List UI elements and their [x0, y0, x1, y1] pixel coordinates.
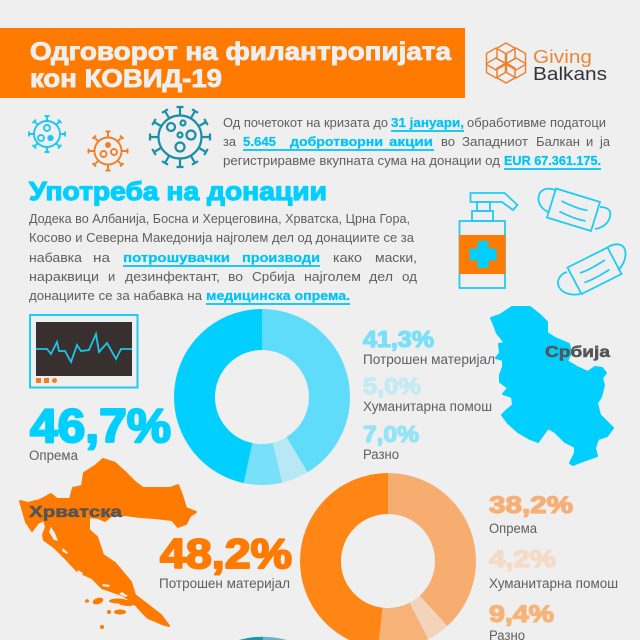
body text block: и — [108, 269, 115, 284]
body text block — [29, 211, 417, 305]
body text block: донациите се за набавка на — [29, 288, 203, 303]
body text block: маски, — [375, 250, 417, 265]
intro text block: обработивме податоци — [467, 115, 606, 130]
body text block: дел — [369, 269, 393, 284]
body text block: на — [93, 250, 111, 265]
legend: Croatia — [489, 492, 618, 640]
legend: Croatia: Опрема — [489, 521, 538, 536]
body text block: Србија — [252, 269, 296, 284]
body text block: потрошувачки — [123, 250, 230, 265]
icon: large teal virus — [150, 107, 210, 167]
body text block: како — [333, 250, 362, 265]
intro text block: Балкан — [536, 134, 580, 149]
donut chart: Serbia — [194, 330, 330, 464]
title banner: Одговорот на филантропијата — [30, 38, 452, 66]
logo: Giving Balkans: Balkans — [533, 64, 607, 84]
icon: mask upper — [538, 188, 610, 231]
stat: Serbia equipment: Опрема — [29, 448, 79, 463]
donut chart: Croatia — [320, 494, 456, 628]
legend: Serbia: Потрошен материјал — [363, 352, 495, 367]
body text block: медицинска опрема. — [206, 288, 350, 303]
donut chart: next country, cropped at page bottom — [239, 637, 287, 640]
intro text block: акции — [389, 134, 433, 149]
title banner: кон КОВИД-19 — [30, 65, 222, 93]
body text block: набавка — [29, 250, 83, 265]
heading: use of donations: Употреба на донации — [29, 176, 327, 206]
intro text block: во — [441, 134, 455, 149]
intro text block: Западниот — [462, 134, 528, 149]
icon: small orange virus — [88, 132, 128, 170]
icon: mask lower — [558, 244, 626, 295]
stat: Croatia consumables: 48,2% — [160, 530, 292, 577]
body text block: во — [228, 269, 243, 284]
intro text block: EUR 67.361.175. — [504, 153, 601, 168]
icon: small blue virus — [29, 116, 65, 152]
body text block: Косово и Северна Македонија најголем дел од донациите се за — [29, 230, 415, 245]
intro text block — [223, 115, 611, 170]
legend: Croatia: Хуманитарна помош — [489, 576, 618, 591]
body text block: најголем — [304, 269, 361, 284]
body text block: производи — [242, 250, 320, 265]
icon: sanitizer bottle — [459, 193, 518, 288]
map: Croatia: Хрватска — [29, 504, 122, 521]
intro text block: за — [223, 134, 237, 149]
legend: Serbia — [363, 326, 495, 462]
legend: Serbia: Разно — [363, 447, 399, 462]
map: Serbia: Србија — [545, 344, 610, 361]
stat: Croatia consumables: Потрошен материјал — [159, 576, 290, 591]
intro text block: 31 јануари, — [391, 115, 464, 130]
body text block: Додека во Албанија, Босна и Херцеговина, Хрватска, Црна Гора, — [29, 211, 410, 226]
map: Croatia — [20, 459, 196, 629]
legend: Serbia: 5,0% — [363, 373, 421, 399]
stat: Croatia consumables — [159, 530, 292, 591]
intro text block: Од почетокот на кризата до — [223, 115, 388, 130]
intro text block: регистриравме вкупната сума на донации од — [223, 153, 500, 168]
legend: Croatia: 9,4% — [489, 601, 554, 628]
body text block: од — [402, 269, 417, 284]
legend: Croatia: 38,2% — [489, 492, 573, 519]
intro text block: ја — [599, 134, 611, 149]
logo: Giving Balkans: Giving — [533, 47, 592, 67]
legend: Croatia: 4,2% — [489, 546, 556, 573]
logo: Giving Balkans — [486, 43, 607, 84]
intro text block: добротворни — [290, 134, 383, 149]
legend: Serbia: Хуманитарна помош — [363, 399, 492, 414]
legend: Serbia: 41,3% — [363, 326, 434, 352]
body text block: дезинфектант, — [125, 269, 220, 284]
icon: heart monitor — [30, 315, 138, 388]
body text block: нараквици — [29, 269, 99, 284]
intro text block: и — [586, 134, 593, 149]
legend: Serbia: 7,0% — [363, 421, 419, 447]
intro text block: 5.645 — [243, 134, 276, 149]
map: Serbia — [491, 307, 613, 465]
title banner — [0, 28, 465, 98]
stat: Serbia equipment: 46,7% — [30, 399, 171, 452]
